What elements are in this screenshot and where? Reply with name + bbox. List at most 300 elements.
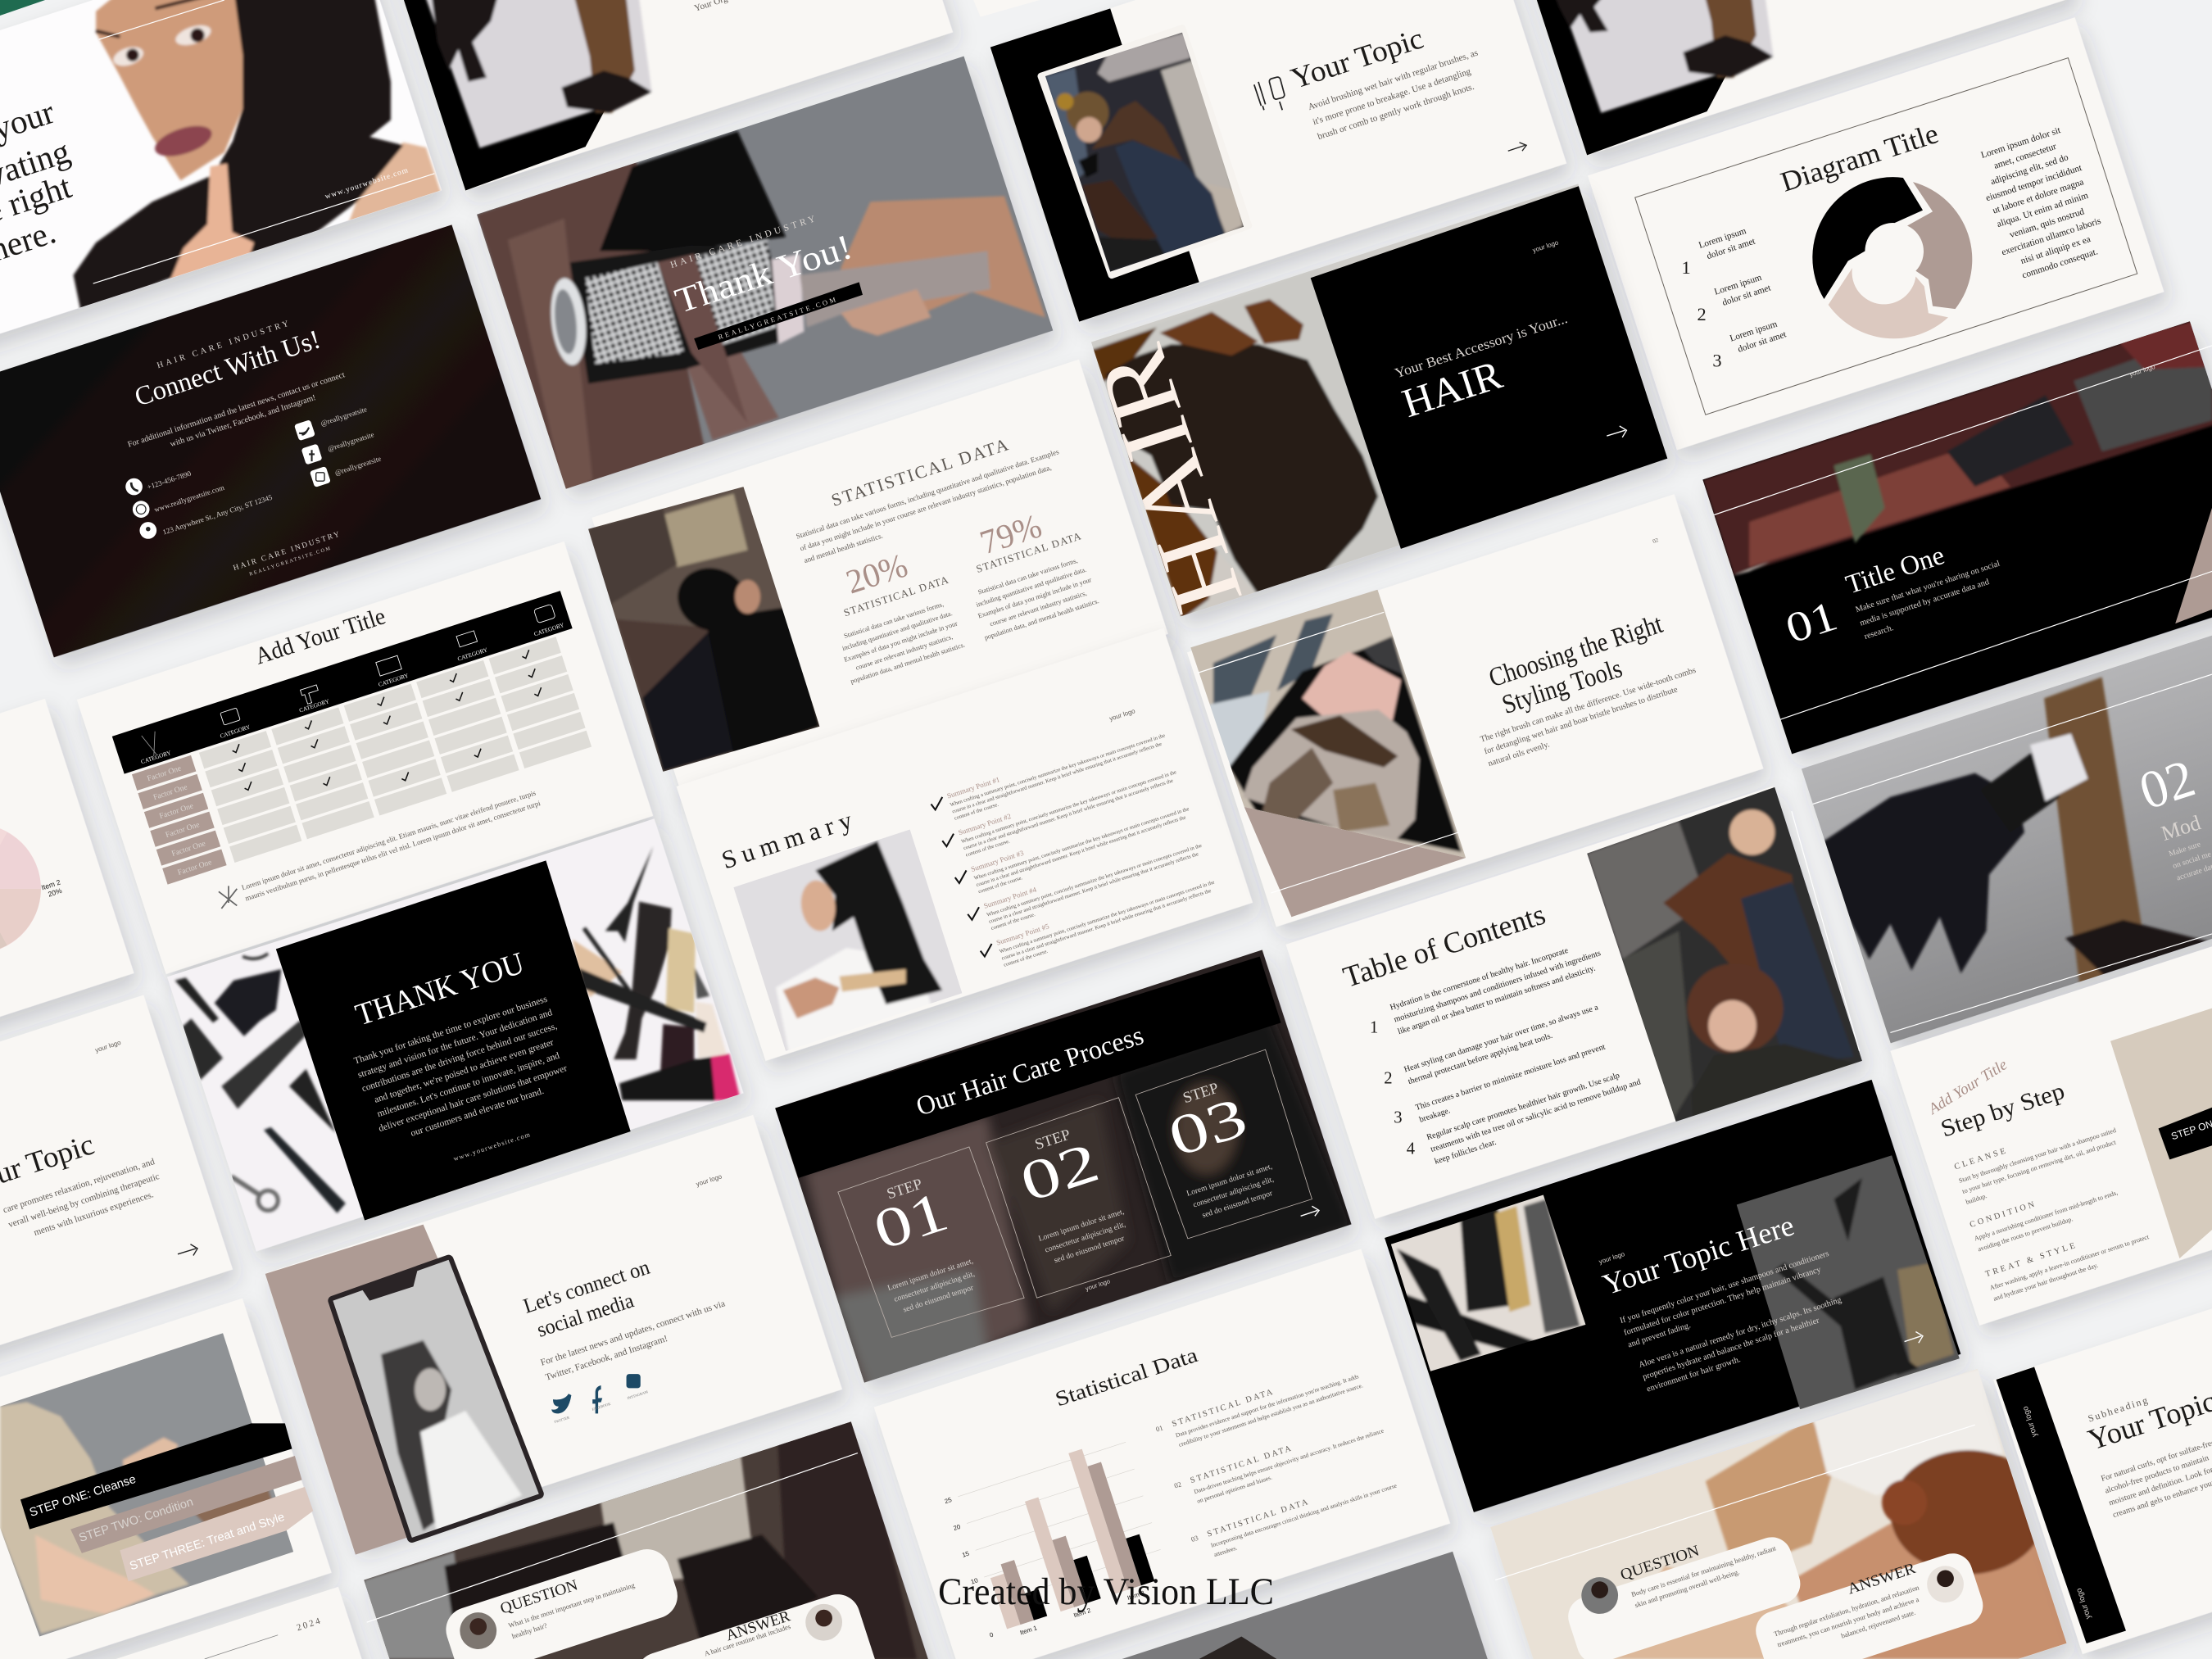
chart: bars: 20 xyxy=(953,1523,962,1532)
heading: hair: HAIR xyxy=(1397,351,1507,426)
list: diagram items xyxy=(1682,224,1788,371)
text: body: The right brush can make all the difference. Use wide-tooth combs xyxy=(1480,666,1697,745)
stat: 20 percent: including quantitative and qualitative data. xyxy=(841,610,954,652)
arrow xyxy=(178,1244,197,1256)
panel: let's connect slide xyxy=(265,1115,842,1555)
step 2: consectetur adipiscing elit, xyxy=(1044,1220,1126,1255)
heading: step by step: Step by Step xyxy=(1938,1078,2068,1143)
chart: pie xyxy=(0,824,41,954)
tan corner xyxy=(1244,807,1466,917)
bubble: question: Body care is essential for maintaining healthy, radiant xyxy=(1630,1543,1778,1598)
list: summary points: When crafting a summary point, concisely summarize the key takeaways or main concepts covered in the xyxy=(999,880,1215,954)
panel: choosing the right slide xyxy=(1185,494,1763,927)
text: chart label: Item 2 xyxy=(40,877,61,891)
panel: cropped pie slide xyxy=(0,699,134,1131)
step 1: STEP xyxy=(885,1176,924,1203)
text: message xyxy=(351,994,577,1149)
panel: gloves slide top xyxy=(377,0,953,190)
text: footnote: Lorem ipsum dolor sit amet, consectetur adipiscing elit. Etiam mauris, nunc vitae eleifend posuere, turpis xyxy=(241,788,537,891)
black block xyxy=(377,0,663,190)
table: checks grid: CATEGORY xyxy=(378,672,410,688)
text: body: alcohol-free products to maintain xyxy=(2104,1453,2210,1496)
bubble: question: healthy hair? xyxy=(510,1621,548,1640)
text: body: care promotes relaxation, rejuvenation, and xyxy=(2,1157,156,1215)
icons: social: INSTAGRAM xyxy=(627,1389,649,1400)
chart: bars: 15 xyxy=(961,1550,970,1559)
table: checks grid: Factor One xyxy=(152,782,188,802)
tan block xyxy=(265,1225,539,1555)
list: steps: Apply a nourishing conditioner from mid-length to ends, xyxy=(1974,1189,2119,1242)
icon: brush and comb xyxy=(1254,76,1285,110)
icons: social: FACEBOOK xyxy=(592,1402,612,1412)
text: diagram paragraph: eiusmod tempor incididunt xyxy=(1985,163,2083,203)
list: contents xyxy=(1370,936,1646,1167)
step 1 xyxy=(838,1147,1024,1337)
step 3: Lorem ipsum dolor sit amet, xyxy=(1185,1162,1273,1199)
text: body: If you frequently color your hair, use shampoos and conditioners xyxy=(1619,1249,1830,1326)
panel: statistical data chart slide xyxy=(874,1249,1450,1659)
list: diagram items: Lorem ipsum xyxy=(1698,226,1747,251)
photo: blonde hair xyxy=(2110,1007,2212,1258)
table: checks grid: Factor One xyxy=(170,839,206,859)
list: contents: Hydration is the cornerstone of healthy hair. Incorporate xyxy=(1389,946,1570,1013)
list: steps: CLEANSE xyxy=(1953,1146,2009,1172)
heading: choosing the right styling tools: Choosing the Right xyxy=(1485,610,1666,693)
text: logo: your logo xyxy=(1085,1277,1111,1292)
text: logo: your logo xyxy=(1598,1250,1626,1266)
text: intro: and mental health statistics. xyxy=(803,532,884,564)
heading: choosing the right styling tools: Styling Tools xyxy=(1498,654,1625,720)
heading: add your title: Add Your Title xyxy=(252,603,388,670)
text: body: research. xyxy=(1863,623,1895,641)
list: diagram items: dolor sit amet xyxy=(1721,283,1773,308)
text: subheading: Subheading xyxy=(2087,1394,2151,1425)
text: website: www.yourwebsite.com xyxy=(452,1131,532,1163)
band: step two xyxy=(70,1456,301,1553)
text: body: brush or comb to gently work through knots. xyxy=(1317,82,1475,142)
text: body xyxy=(2168,838,2212,883)
photo: gloved hands and hair xyxy=(406,0,652,148)
heading: title one: Title One xyxy=(1843,541,1948,601)
bubble: question: What is the most important step in maintaining xyxy=(507,1580,637,1630)
bubble: answer: balanced, rejuvenated state. xyxy=(1840,1608,1916,1640)
text: eyebrow: HAIR CARE INDUSTRY xyxy=(156,319,292,370)
social list: @reallygreatsite xyxy=(333,454,382,477)
contact list: www.reallygreatsite.com xyxy=(153,483,225,514)
list: summary points: course in a clear and straightforward manner. Keep it brief while ensuring that it accurately reflects the xyxy=(951,741,1163,815)
list: diagram items: 1 xyxy=(1682,257,1691,278)
text: diagram paragraph: commodo consequat. xyxy=(2021,247,2099,281)
text: chart label xyxy=(40,877,64,900)
photo: woman combing hair xyxy=(719,818,973,1058)
panel: grey slide bottom centre xyxy=(966,1552,1542,1659)
tablet frame xyxy=(1041,28,1249,275)
pill: website xyxy=(694,282,863,350)
contact list xyxy=(125,469,274,539)
text: script title: Add Your Title xyxy=(1924,1056,2010,1119)
chart: segmented ring xyxy=(1812,177,1972,338)
text: diagram paragraph: nisi ut aliquip ex ea xyxy=(2019,234,2092,266)
text: year: 2024 xyxy=(296,1616,324,1633)
text: module: Mod xyxy=(2158,810,2204,845)
list: statistics: Incorporating data encourages critical thinking and analysis skills in your course xyxy=(1210,1481,1398,1549)
text: message: and together, we're poised to achieve even greater xyxy=(373,1038,555,1105)
arrow xyxy=(1301,1206,1319,1216)
heading: connect with us: Connect With Us! xyxy=(131,324,324,413)
bubble: answer xyxy=(1751,1548,1988,1659)
text: message: Thank you for taking the time to explore our business xyxy=(353,995,549,1067)
text: logo: your logo xyxy=(94,1039,122,1054)
photo: round brush and dryer xyxy=(477,131,1045,494)
text: body: moisture and definition. Look for xyxy=(2108,1466,2212,1507)
photo: stylist and client xyxy=(1580,783,1870,1129)
list: summary points: course in a clear and straightforward manner. Keep it brief while ensuring that it accurately reflects the xyxy=(963,778,1174,851)
table: checks grid: Factor One xyxy=(146,764,183,783)
panel: summary slide xyxy=(677,628,1253,1061)
table: checks grid xyxy=(112,591,609,886)
list: contents: treatments with tea tree oil or salicylic acid to remove buildup and xyxy=(1430,1077,1642,1154)
stat: 79 percent: Statistical data can take various forms, xyxy=(977,557,1078,596)
photo: blonde hair xyxy=(0,1326,303,1643)
panel: portrait slide xyxy=(0,0,443,348)
text: body: Aloe vera is a natural remedy for dry, itchy scalps. Its soothing xyxy=(1638,1295,1843,1370)
text: body: natural oils evenly. xyxy=(1487,740,1551,768)
photo: blurred hair xyxy=(805,1016,1354,1403)
list: contents: like argan oil or shea butter to maintain softness and elasticity. xyxy=(1397,964,1597,1036)
stat: 20 percent: population data, and mental health statistics. xyxy=(850,641,966,685)
photo: woman with long black hair xyxy=(74,0,443,316)
band: step one xyxy=(20,1423,292,1530)
text: body: and prevent fading. xyxy=(1627,1321,1692,1350)
table: checks grid: Factor One xyxy=(177,858,213,877)
heading: let's connect: Let's connect on xyxy=(520,1255,653,1318)
photo: curly hair xyxy=(1093,297,1399,616)
text: diagram paragraph: veniam, quis nostrud xyxy=(2009,206,2086,240)
photo: scissors and comb cutting hair xyxy=(1702,317,2212,623)
chart: bars: Item 2 xyxy=(1072,1607,1092,1619)
heading: process: Our Hair Care Process xyxy=(913,1021,1147,1122)
list: summary points: content of the course. xyxy=(990,912,1036,931)
list: summary points: When crafting a summary point, concisely summarize the key takeaways or main concepts covered in the xyxy=(973,806,1190,882)
photo: hair washing xyxy=(1185,578,1474,875)
list: statistics: on personal opinions and biases. xyxy=(1196,1473,1273,1505)
list: contents: This creates a barrier to minimize moisture loss and prevent xyxy=(1414,1042,1607,1113)
arrow xyxy=(1905,1332,1923,1343)
text: footnote: mauris vestibulum purus, in pellentesque tellus elit vel nisl. Lorem ipsum dolor sit amet, consectetur turpi xyxy=(244,799,542,903)
list: summary points: Summary Point #2 xyxy=(957,812,1012,836)
bubble: answer xyxy=(631,1589,882,1659)
list: summary points: Summary Point #1 xyxy=(946,775,1001,800)
text: body xyxy=(1619,1249,1852,1395)
list: statistics: 03 xyxy=(1190,1534,1199,1543)
list: summary points: content of the course. xyxy=(1003,949,1049,968)
stat: 79 percent: course are relevant industry statistics, xyxy=(989,589,1088,628)
step 2: sed do eiusmod tempor xyxy=(1053,1234,1126,1265)
text: diagram paragraph: amet, consectetur xyxy=(1992,142,2058,171)
watermark: Created by Vision LLC xyxy=(938,1571,1274,1613)
text: logo: your logo xyxy=(695,1172,723,1188)
step 3: 03 xyxy=(1161,1086,1254,1168)
text: footer: REALLYGREATSITE.COM xyxy=(248,545,333,578)
black strip xyxy=(1997,1367,2126,1643)
text: body: properties hydrate and balance the scalp for a healthier xyxy=(1642,1316,1821,1382)
photo: gloved hands and hair xyxy=(1528,0,1773,113)
list: contents: Regular scalp care promotes healthier hair growth. Use scalp xyxy=(1426,1071,1620,1142)
text: body: Twitter, Facebook, and Instagram! xyxy=(544,1334,669,1383)
panel: your topic tablet slide xyxy=(990,0,1566,322)
panel: hair care process slide xyxy=(775,950,1354,1403)
list: summary points: content of the course. xyxy=(954,802,999,822)
text: body: ments with luxurious experiences. xyxy=(33,1190,155,1238)
panel: your topic slide left xyxy=(0,995,233,1428)
list: steps: After washing, apply a leave-in conditioner or serum to protect xyxy=(1989,1233,2151,1292)
text: body: media is supported by accurate data and xyxy=(1859,578,1991,628)
panel: module 02 slide xyxy=(1802,610,2212,1043)
contact list: 123 Anywhere St., Any City, ST 12345 xyxy=(161,493,274,537)
pill: website: REALLYGREATSITE.COM xyxy=(717,295,839,341)
text: diagram paragraph: adipiscing elit, sed do xyxy=(1989,152,2070,187)
table: checks grid: CATEGORY xyxy=(457,646,489,663)
bubble: question: skin and promoting overall well-being. xyxy=(1634,1567,1741,1609)
text: chart label: 20% xyxy=(47,886,63,899)
text: logo top: your logo xyxy=(2021,1405,2039,1438)
photo: tools right xyxy=(1728,1149,1968,1418)
table: checks grid: CATEGORY xyxy=(298,698,331,714)
photo: tools left xyxy=(1383,1185,1594,1383)
step 1: Lorem ipsum dolor sit amet, xyxy=(886,1257,974,1293)
list: summary points: Summary Point #5 xyxy=(995,922,1050,947)
text: body: for detangling wet hair and boar bristle brushes to distribute xyxy=(1483,685,1679,756)
text: logo: your logo xyxy=(1532,238,1560,254)
text: message: our customers and elevate our brand. xyxy=(410,1086,546,1139)
black header xyxy=(775,956,1281,1178)
stat: 79 percent: Examples of data you might include in your xyxy=(977,576,1093,620)
text: body: verall well-being by combining therapeutic xyxy=(7,1172,161,1230)
list: contents: thermal protectant before applying heat tools. xyxy=(1407,1031,1553,1086)
list: statistics: attendees. xyxy=(1213,1543,1238,1558)
stat: 20 percent: 20% xyxy=(841,546,912,601)
text: intro: with us via Twitter, Facebook, and Instagram! xyxy=(169,393,317,449)
bubble: answer: treatments, you can nourish your body and achieve a xyxy=(1776,1595,1920,1648)
list: contents: moisturizing shampoos and conditioners infused with ingredients xyxy=(1393,949,1602,1025)
heading: summary: Summary xyxy=(718,805,859,874)
heading: let's connect: social media xyxy=(534,1288,637,1342)
social list: @reallygreatsite xyxy=(320,405,368,428)
text: body xyxy=(2,1157,165,1244)
panel: steps slide left xyxy=(0,1299,332,1659)
black block xyxy=(1498,0,1784,155)
list: diagram items: 3 xyxy=(1712,351,1722,371)
text: body: For the latest news and updates, connect with us via xyxy=(539,1299,727,1368)
stat: 79 percent: including quantitative and qualitative data. xyxy=(975,566,1087,609)
list: contents: 1 xyxy=(1370,1018,1378,1036)
bubble: question xyxy=(440,1543,683,1659)
text: message: milestones. Let's continue to innovate, inspire, and xyxy=(376,1051,561,1119)
list: contents: Heat styling can damage your hair over time, so always use a xyxy=(1403,1003,1600,1075)
list: contents: keep follicles clear. xyxy=(1434,1138,1498,1167)
stat: 20 percent: Examples of data you might include in your xyxy=(843,619,959,664)
table: checks grid: CATEGORY xyxy=(140,750,173,765)
list: summary points xyxy=(931,723,1220,968)
contact list: +123-456-7890 xyxy=(146,469,193,491)
panel: bottom slide with year xyxy=(0,1587,428,1659)
number: 02: 02 xyxy=(2133,749,2202,822)
text: body: environment for hair growth. xyxy=(1646,1355,1742,1394)
list: steps: to your hair type, focusing on removing dirt, oil, and product xyxy=(1961,1138,2118,1195)
list: contents: 2 xyxy=(1384,1069,1393,1087)
panel: diagram title slide xyxy=(1588,17,2164,450)
bubble: question xyxy=(1563,1532,1806,1659)
step 1: 01 xyxy=(866,1180,955,1262)
heading: table of contents: Table of Contents xyxy=(1339,898,1549,994)
stat: 20 percent: Statistical data can take various forms, xyxy=(843,601,945,640)
text: intro: For additional information and the latest news, contact us or connect xyxy=(127,370,347,450)
bubble: answer: A hair care routine that includes xyxy=(703,1622,792,1657)
band: step one: STEP ONE: Cleanse xyxy=(28,1473,138,1520)
bubble: answer: ANSWER xyxy=(724,1607,792,1644)
bubble: question: QUESTION xyxy=(1618,1542,1702,1584)
text: body: on social me xyxy=(2172,850,2212,871)
list: diagram items: dolor sit amet xyxy=(1706,236,1757,261)
panel: step by step slide xyxy=(1890,893,2212,1326)
list: steps: TREAT & STYLE xyxy=(1984,1240,2078,1279)
panel: question and answer slide right xyxy=(1490,1368,2074,1659)
photo: combs and clips xyxy=(175,846,741,1213)
band: step three: STEP THREE: Treat and Style xyxy=(128,1511,286,1573)
step 2: Lorem ipsum dolor sit amet, xyxy=(1037,1208,1126,1244)
list: summary points: course in a clear and straightforward manner. Keep it brief while ensuring that it accurately reflects the xyxy=(976,814,1186,888)
bubble: answer: Through regular exfoliation, hydration, and relaxation xyxy=(1773,1583,1920,1638)
stat: 20 percent: STATISTICAL DATA xyxy=(842,573,950,619)
chart: bars: 25 xyxy=(944,1496,953,1505)
list: diagram items: Lorem ipsum xyxy=(1713,273,1763,297)
list: statistics xyxy=(1155,1361,1401,1564)
text: body xyxy=(1307,48,1489,142)
panel: question and answer slide xyxy=(364,1411,941,1659)
text: diagram paragraph: Lorem ipsum dolor sit xyxy=(1980,125,2062,161)
panel: statistical data slide xyxy=(578,360,1168,792)
panel: cropped green slide corner xyxy=(0,0,45,16)
heading: your topic: Your Topic xyxy=(1287,21,1427,95)
text: intro: of data you might include in your course are relevant industry statistics, population data, xyxy=(799,463,1053,552)
table: checks grid: Factor One xyxy=(165,820,201,840)
phone xyxy=(324,1249,551,1545)
text: body: formulated for color protection. They help maintain vibrancy xyxy=(1623,1265,1823,1338)
text: diagram paragraph xyxy=(1969,122,2111,284)
big vertical word: HAIR xyxy=(1077,333,1264,625)
text: eyebrow: HAIR CARE INDUSTRY xyxy=(669,213,819,270)
text: diagram paragraph: aliqua. Ut enim ad minim xyxy=(1996,191,2090,229)
text: logo bottom: your logo xyxy=(2074,1587,2093,1620)
heading: statistical data: Statistical Data xyxy=(1052,1343,1201,1411)
list: steps: and hydrate your hair throughout the day. xyxy=(1992,1262,2099,1303)
bubble: answer: ANSWER xyxy=(1846,1560,1918,1598)
list: statistics: 01 xyxy=(1155,1424,1164,1434)
panel: gloves slide top right xyxy=(1498,0,2074,155)
panel: thank you photo slide xyxy=(477,57,1053,494)
stat: 79 percent: STATISTICAL DATA xyxy=(975,529,1083,575)
panel: add your title table slide xyxy=(77,542,653,974)
heading: choosing the right styling tools xyxy=(1485,610,1675,722)
step 1: sed do eiusmod tempor xyxy=(902,1283,975,1315)
text: website: www.yourwebsite.com xyxy=(324,166,410,202)
chart: bars xyxy=(942,1435,1173,1646)
social list: @reallygreatsite xyxy=(327,430,375,453)
list: summary points: When crafting a summary point, concisely summarize the key takeaways or main concepts covered in the xyxy=(961,769,1177,845)
step 2 xyxy=(986,1098,1171,1298)
band: step three xyxy=(120,1487,313,1581)
table: checks grid: Factor One xyxy=(158,801,195,821)
step 2: STEP xyxy=(1033,1126,1072,1154)
black block xyxy=(990,8,1199,322)
step 3: consectetur adipiscing elit, xyxy=(1192,1175,1275,1209)
text: page number: 02 xyxy=(1652,537,1660,545)
arrow xyxy=(1607,426,1626,437)
panel: thank you tools slide xyxy=(167,818,743,1251)
list: statistics: STATISTICAL DATA xyxy=(1190,1444,1294,1485)
stat: 79 percent: population data, and mental health statistics. xyxy=(984,597,1100,641)
text: body: it's more prone to breakage. Use a detangling xyxy=(1312,66,1472,127)
list: diagram items: Lorem ipsum xyxy=(1729,320,1779,344)
social list xyxy=(294,405,382,487)
text: lead-in: Your Best Accessory is Your... xyxy=(1393,310,1570,381)
panel: hair slide xyxy=(1077,184,1667,625)
photo: barber xyxy=(364,1411,917,1659)
panel: your topic slide far right xyxy=(1993,1222,2212,1654)
text: message: contributions are the driving force behind our success, xyxy=(360,1022,559,1094)
chart: bars: 10 xyxy=(970,1576,979,1586)
list: steps: avoiding the roots to prevent buildup. xyxy=(1977,1215,2074,1253)
list: summary points: Summary Point #3 xyxy=(970,849,1025,873)
chart: bars: 0 xyxy=(989,1631,995,1639)
heading: let's connect xyxy=(520,1255,661,1344)
text: body: Make sure xyxy=(2168,840,2202,859)
text: footer: HAIR CARE INDUSTRY xyxy=(233,530,342,573)
list: statistics: credibility to your statements and helps establish you as an authoritative source. xyxy=(1177,1381,1364,1448)
chart: bars: Item 1 xyxy=(1019,1624,1038,1637)
stat: 20 percent xyxy=(836,546,966,685)
text: logo: your logo xyxy=(2128,363,2156,378)
panel: table of contents slide xyxy=(1286,783,1870,1219)
text: message: deliver exceptional hair care solutions that empower xyxy=(378,1063,569,1134)
list: summary points: course in a clear and straightforward manner. Keep it brief while ensuring that it accurately reflects the xyxy=(1001,888,1212,962)
text: body xyxy=(1855,560,2010,641)
stat: 20 percent: course are relevant industry statistics, xyxy=(854,633,954,672)
list: summary points: Summary Point #4 xyxy=(982,885,1038,910)
table: checks grid: CATEGORY xyxy=(220,723,252,740)
icon: scissors and comb xyxy=(219,886,237,909)
list: statistics: Data-driven teaching helps ensure objectivity and accuracy. It reduces the reliance xyxy=(1193,1426,1385,1495)
heading: your topic here: Your Topic Here xyxy=(1598,1208,1798,1301)
step 3 xyxy=(1135,1049,1312,1239)
heading: thank you: Thank You! xyxy=(671,228,857,321)
list: steps: buildup. xyxy=(1965,1192,1988,1206)
list: statistics: 02 xyxy=(1173,1480,1182,1490)
stat: 79 percent xyxy=(970,506,1100,641)
photo: gloved hands tinting hair xyxy=(1820,678,2212,987)
number: 01: 01 xyxy=(1780,592,1843,653)
black panel xyxy=(276,860,631,1220)
list: contents: 3 xyxy=(1394,1109,1403,1127)
step 3: sed do eiusmod tempor xyxy=(1201,1189,1274,1220)
arrow xyxy=(1508,143,1526,151)
icons: social: TWITTER xyxy=(553,1416,570,1424)
heading: diagram title: Diagram Title xyxy=(1777,118,1942,198)
panel: title one slide xyxy=(1702,317,2212,754)
photo: massage xyxy=(1608,1368,2074,1659)
photo: client at salon basin xyxy=(578,479,832,783)
list: contents: breakage. xyxy=(1418,1106,1452,1125)
